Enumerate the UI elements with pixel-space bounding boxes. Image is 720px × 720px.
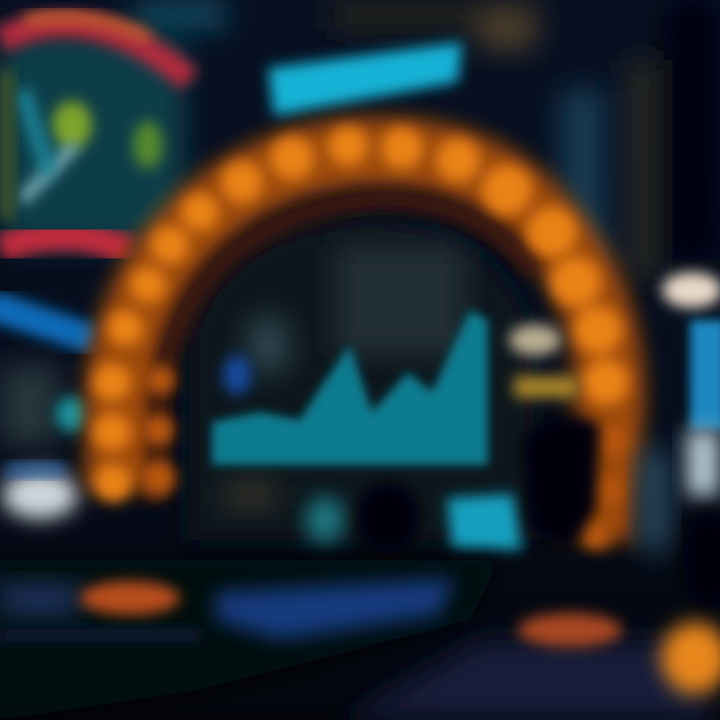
background buildings [135, 0, 720, 280]
arch: orange balloons [93, 126, 629, 550]
right figure [640, 272, 720, 610]
cyan neon sign [268, 42, 462, 116]
dark silhouette figure [522, 415, 600, 550]
foreground street [0, 560, 720, 720]
left neon signs [0, 305, 95, 519]
lit windows beside chart [509, 324, 578, 398]
lower screen items [225, 482, 522, 554]
inner dark arch [190, 220, 540, 540]
chart screen [212, 245, 488, 465]
icon: left tower sign [0, 17, 190, 252]
